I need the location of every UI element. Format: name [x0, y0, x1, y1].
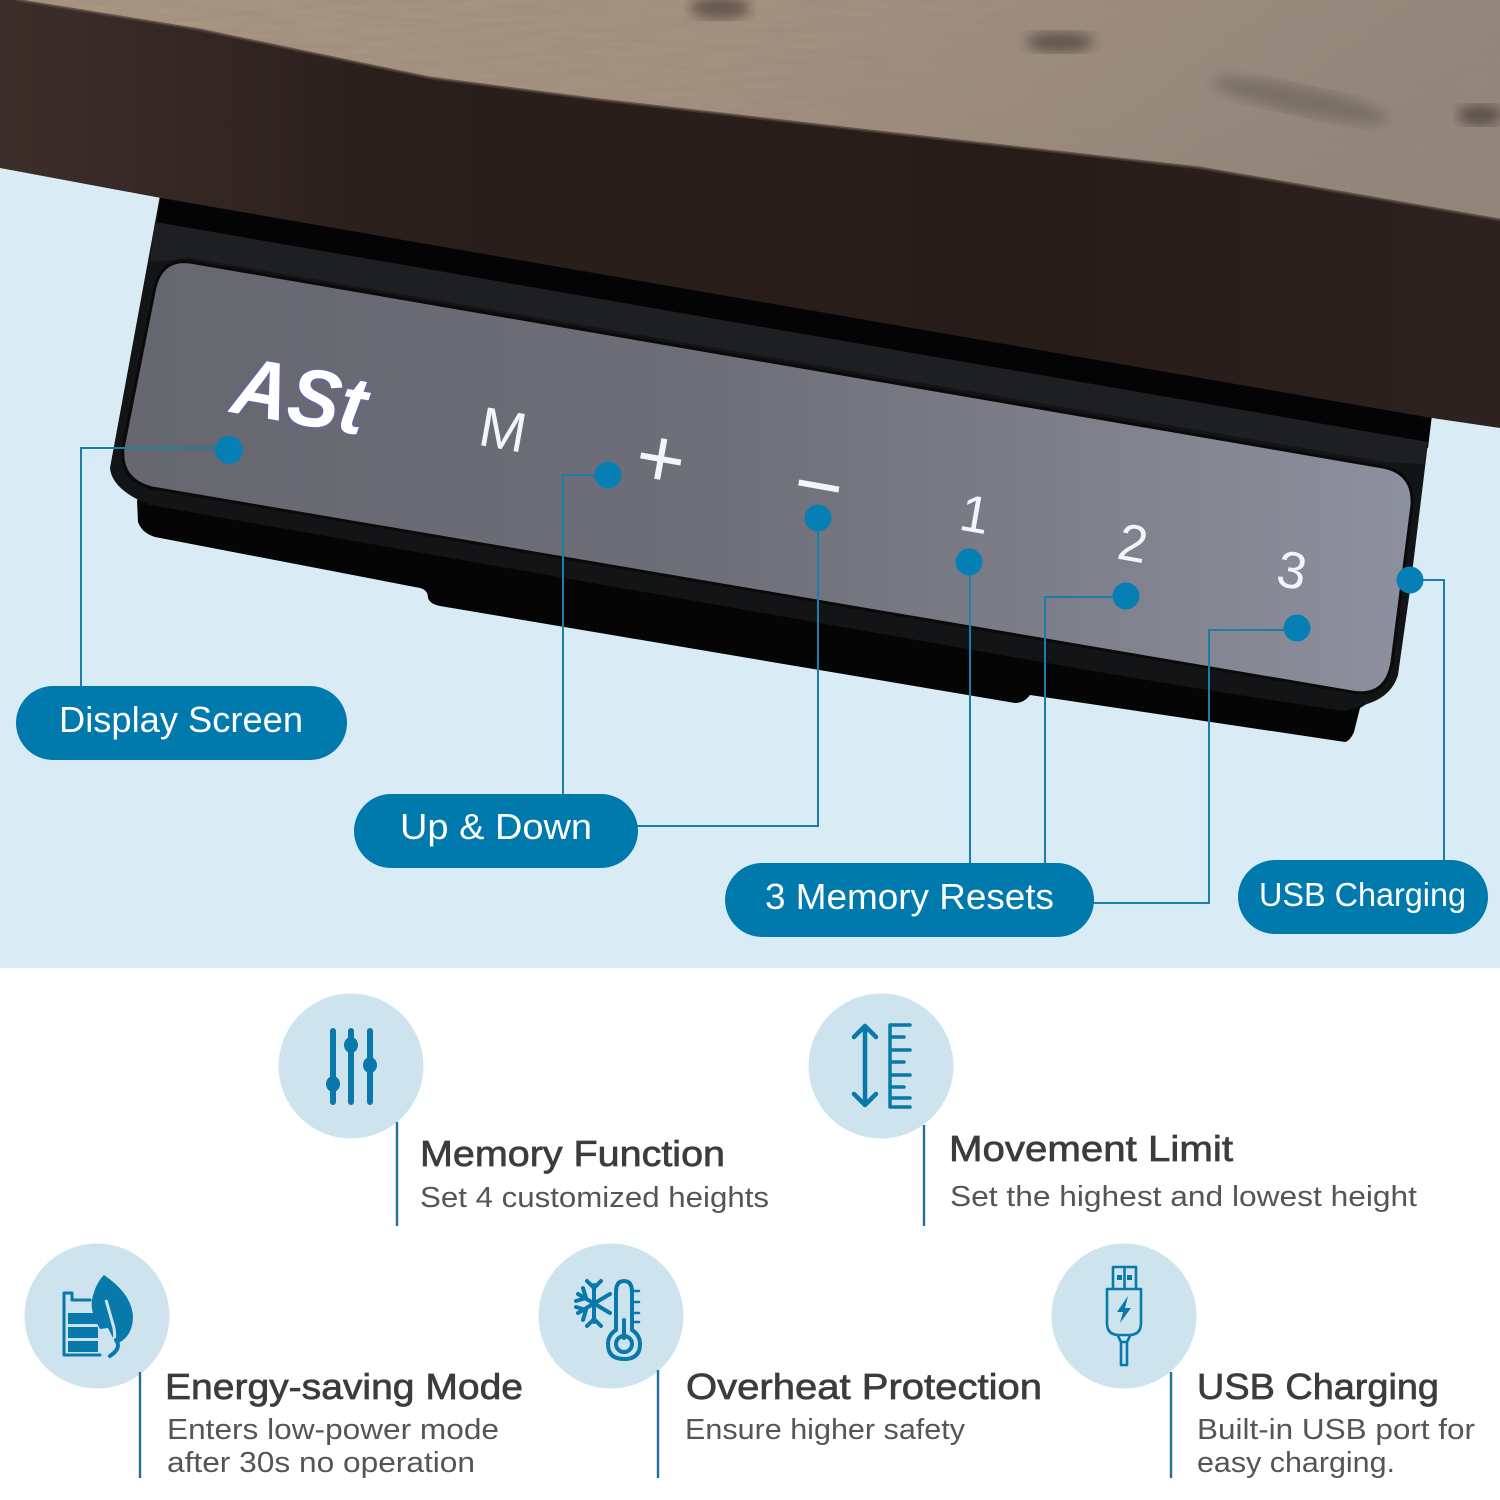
- feature: Movement Limit: Set the highest and lowest height: [950, 1181, 1417, 1213]
- desktop: wood tabletop: [0, 0, 1500, 428]
- callout: USB Charging: USB Charging: [1259, 876, 1466, 913]
- feature: Memory Function: Memory Function: [420, 1133, 725, 1174]
- touch key labels: 1: [956, 484, 994, 546]
- control panel housing: [110, 190, 1432, 742]
- touch key labels: +: [629, 407, 693, 509]
- feature: Memory Function: [278, 994, 769, 1226]
- touch key labels: 2: [1114, 513, 1152, 575]
- feature: Overheat Protection: Ensure higher safety: [685, 1414, 966, 1446]
- callout: USB Charging: [1238, 566, 1488, 934]
- feature: Memory Function: Set 4 customized heights: [420, 1182, 769, 1214]
- feature: USB Charging: USB Charging: [1197, 1366, 1439, 1407]
- callout: Up and Down: [354, 462, 832, 868]
- panel: white feature area: [0, 968, 1500, 1500]
- callout: Up and Down: Up & Down: [400, 806, 592, 847]
- touch key labels: −: [787, 434, 851, 536]
- icon: battery and leaf: [64, 1275, 133, 1356]
- callout: Display Screen: [16, 436, 347, 760]
- icon: sliders: [326, 1031, 377, 1102]
- display readout: ASt: [224, 340, 377, 454]
- feature: Overheat Protection: Overheat Protection: [686, 1366, 1042, 1407]
- callout: Display Screen: Display Screen: [59, 699, 303, 740]
- feature: Energy-saving Mode: Energy-saving Mode: [165, 1366, 523, 1407]
- icon: height arrow and ruler: [854, 1025, 910, 1107]
- panel: light blue background: [0, 0, 1500, 968]
- touch key labels: 3: [1273, 540, 1311, 602]
- callout: 3 Memory Resets: 3 Memory Resets: [765, 876, 1054, 917]
- feature: Energy-saving Mode: [24, 1244, 523, 1479]
- feature: USB Charging: Built-in USB port for: [1197, 1414, 1475, 1446]
- feature: Energy-saving Mode: Enters low-power mode: [167, 1414, 499, 1446]
- display readout: ASt: [224, 340, 377, 454]
- feature: Movement Limit: Movement Limit: [949, 1128, 1233, 1169]
- icon: USB plug: [1107, 1267, 1141, 1365]
- touch key labels: [475, 394, 1311, 602]
- feature: USB Charging: [1052, 1244, 1475, 1479]
- feature: Movement Limit: [808, 994, 1417, 1226]
- icon: snowflake and thermometer: [576, 1281, 640, 1359]
- feature: USB Charging: easy charging.: [1197, 1447, 1395, 1479]
- callout: 3 Memory Resets: [725, 548, 1310, 937]
- touch key labels: M: [475, 394, 532, 465]
- feature: Overheat Protection: [538, 1244, 1042, 1478]
- feature: Energy-saving Mode: after 30s no operation: [167, 1447, 475, 1479]
